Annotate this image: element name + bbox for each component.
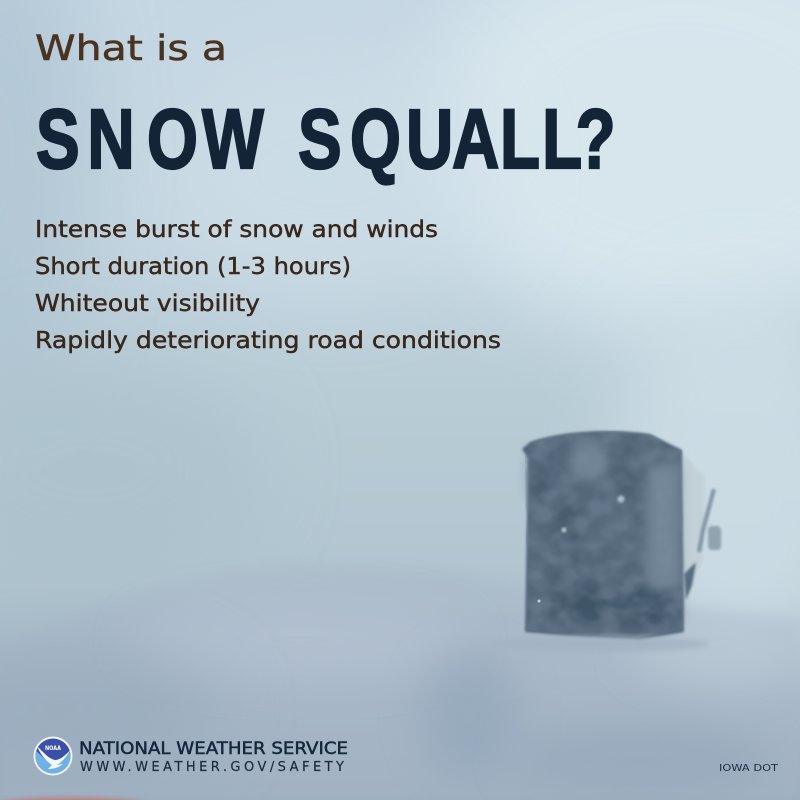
side mirror	[699, 489, 721, 552]
footer: organisation name: NATIONAL WEATHER SERVICE	[79, 739, 348, 759]
bullet text block: Short duration (1-3 hours)	[35, 252, 351, 280]
icon: NOAA logo: NOAA	[45, 744, 61, 752]
icon: NOAA logo	[34, 736, 72, 776]
truck in snow	[520, 430, 722, 650]
footer: website: WWW.WEATHER.GOV/SAFETY	[80, 760, 344, 775]
title: SNOW SQUALL?	[36, 92, 616, 186]
drifting snow at base	[490, 636, 710, 652]
wheel under trailer side	[684, 562, 696, 600]
trailer side panel	[680, 450, 705, 632]
rear face texture	[523, 431, 686, 636]
subtitle: What is a	[35, 29, 227, 69]
road surface	[0, 565, 800, 800]
photo credit: IOWA DOT	[719, 763, 779, 774]
bullet text block	[35, 215, 501, 354]
trailer rear face	[522, 431, 684, 640]
bullet text block: Whiteout visibility	[35, 289, 260, 317]
bullet text block: Intense burst of snow and winds	[35, 215, 438, 243]
bullet text block: Rapidly deteriorating road conditions	[35, 326, 501, 354]
